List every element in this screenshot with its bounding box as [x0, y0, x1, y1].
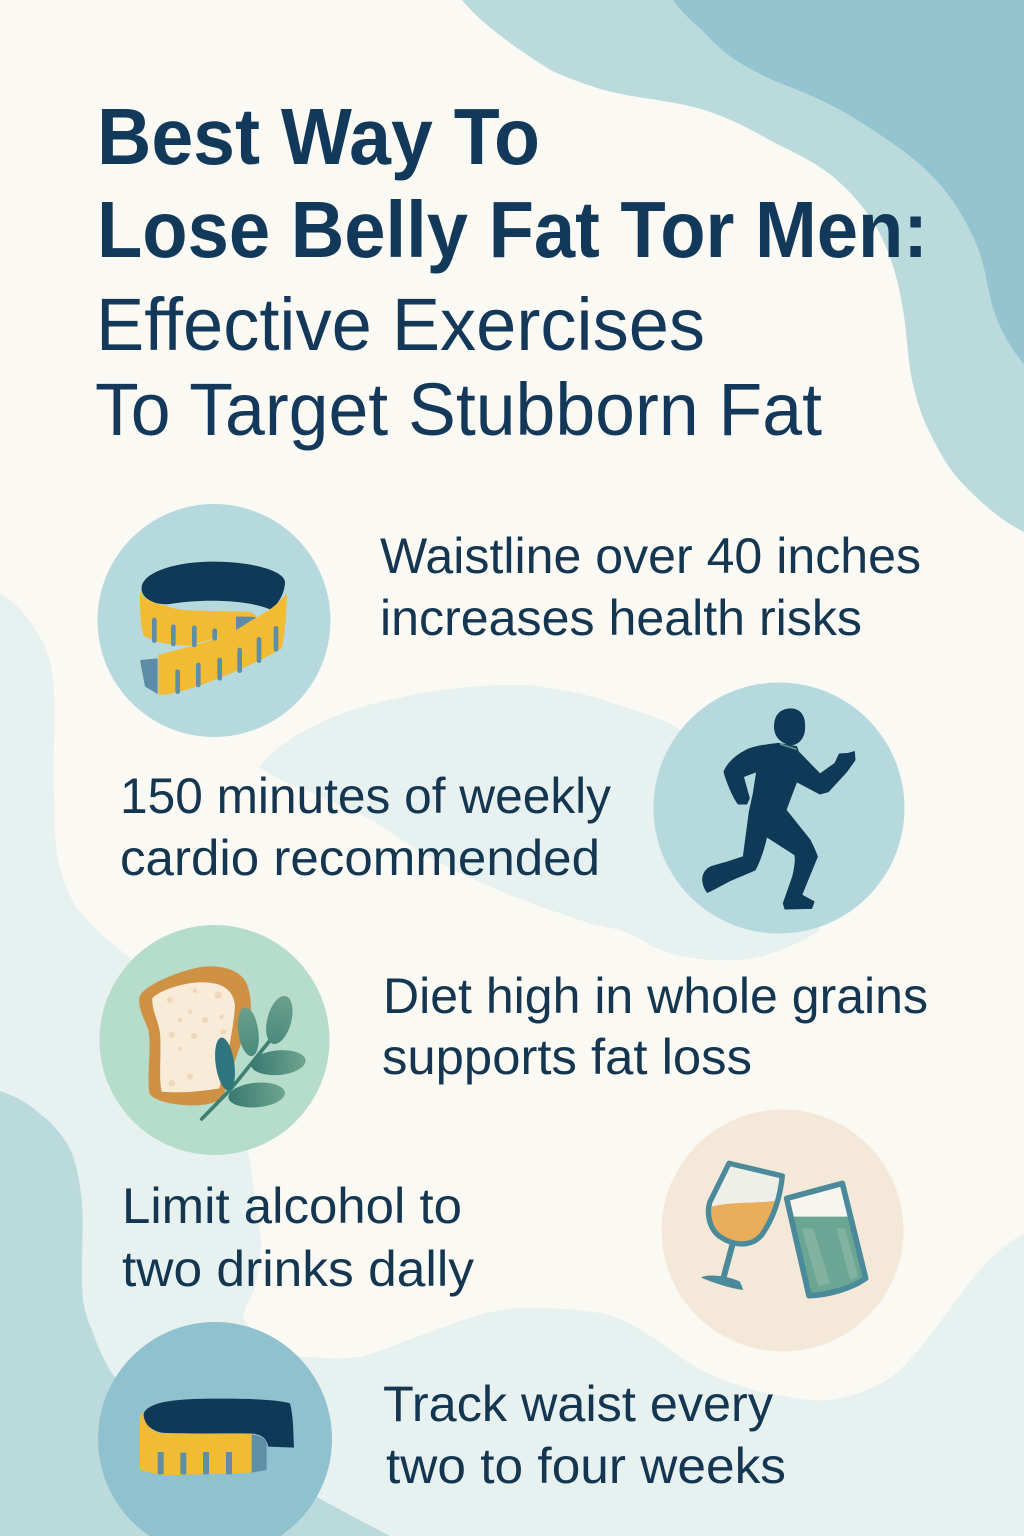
text: whole grains: Diet high in whole grains: [383, 968, 928, 1024]
subtitle line 2: To Target Stubborn Fat: [95, 368, 822, 451]
icon: drinks circle: [662, 1110, 904, 1352]
icon: runner circle: [654, 682, 904, 934]
icon: measuring tape circle: [98, 504, 330, 737]
text: waistline: [380, 528, 921, 646]
text: cardio: [120, 768, 611, 886]
background blob: top right light: [462, 0, 1024, 532]
subtitle line 1: Effective Exercises: [96, 283, 705, 366]
title line 1: Best Way To: [97, 92, 540, 181]
text: whole grains: [382, 968, 928, 1085]
text: cardio: 150 minutes of weekly: [120, 768, 611, 824]
text: alcohol: Limit alcohol to: [122, 1178, 462, 1234]
text: waistline: Waistline over 40 inches: [380, 528, 921, 584]
icon: bread and leaves circle: [100, 925, 330, 1155]
title line 2: Lose Belly Fat Tor Men:: [97, 185, 928, 274]
background blob: bottom left medium: [0, 1091, 390, 1536]
background blob: top right dark: [673, 0, 1024, 364]
icon: tape circle bottom: [98, 1322, 332, 1536]
text: track waist: two to four weeks: [386, 1438, 786, 1494]
text: alcohol: [122, 1178, 474, 1297]
background blob: lower pale: [0, 593, 1024, 1536]
background blob: middle pale: [259, 685, 820, 960]
text: track waist: [383, 1376, 786, 1494]
text: alcohol: two drinks dally: [122, 1241, 474, 1297]
text: track waist: Track waist every: [383, 1376, 773, 1432]
text: waistline: increases health risks: [380, 590, 862, 646]
text: cardio: cardio recommended: [120, 830, 600, 886]
title: [95, 92, 928, 451]
text: whole grains: supports fat loss: [382, 1029, 752, 1085]
